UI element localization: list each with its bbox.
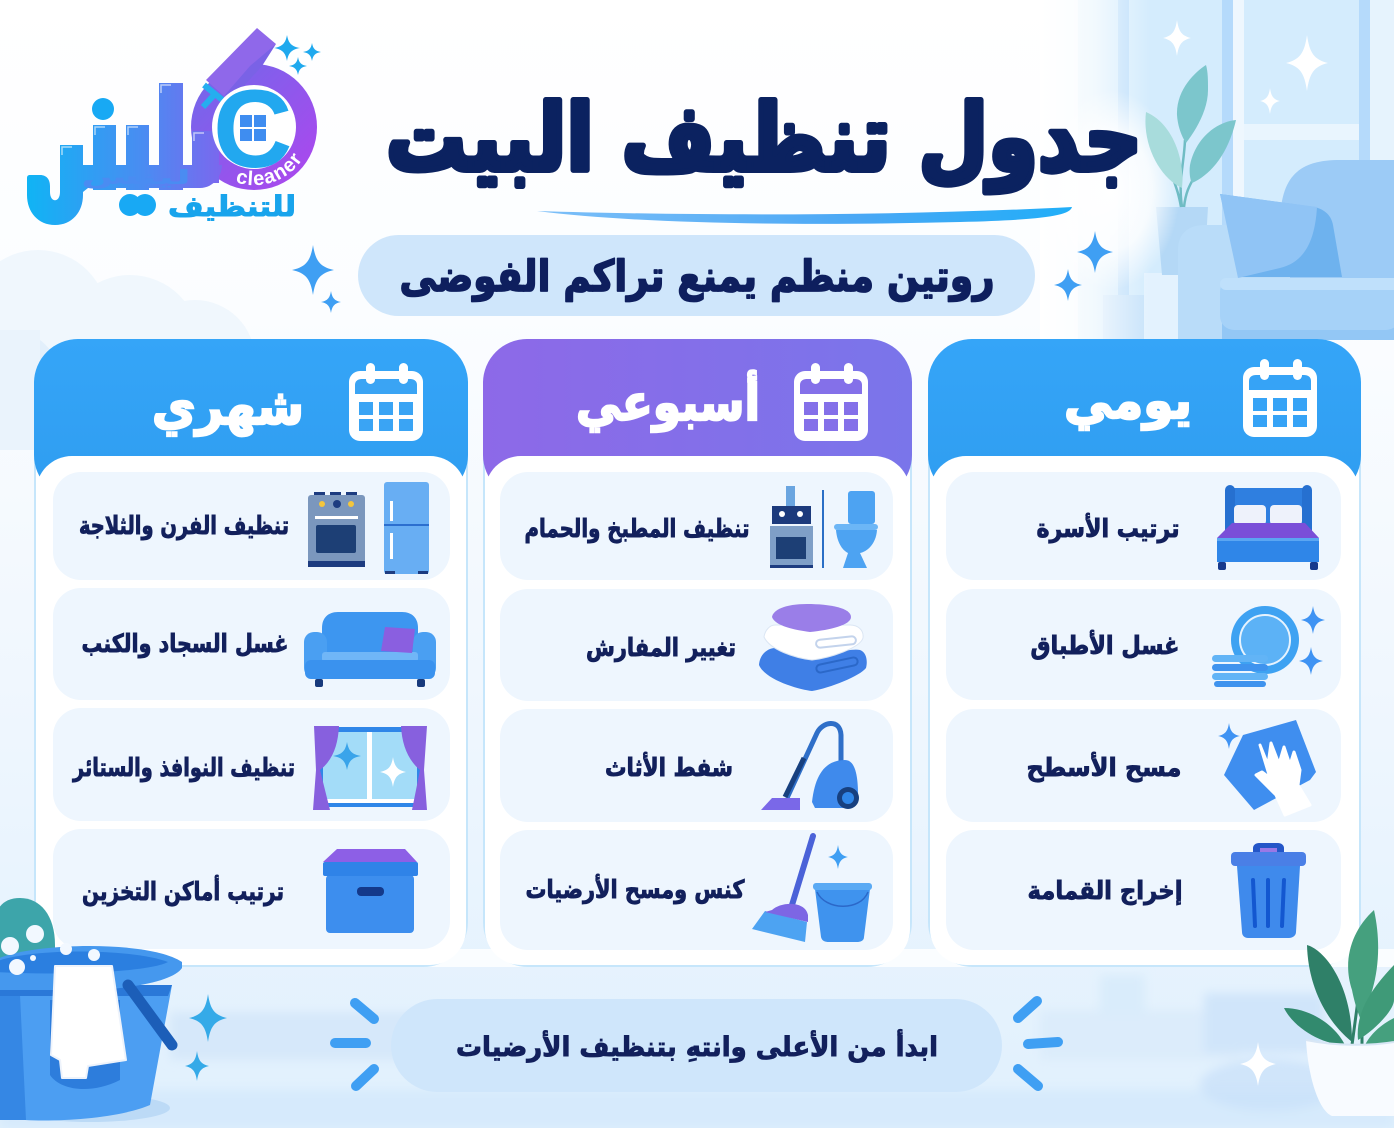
logo: sparkles [274,35,321,75]
logo: cleaner: cleaner [236,153,300,186]
subtitle text: روتين منظم يمنع تراكم الفوضى [400,252,994,302]
title: جدول تنظيف البيت [386,85,1142,193]
row: carpets and sofa [53,588,450,700]
row: take out trash: إخراج القمامة [1028,876,1182,906]
panel: daily [928,339,1361,966]
logo: purple disc [191,64,317,190]
rays left [335,1003,374,1086]
row: wipe surfaces: مسح الأسطح [1026,752,1182,783]
rays right [1018,1001,1058,1086]
row: storage [53,829,450,949]
daily heading: يومي [1064,372,1192,431]
logo: wordmark: لينس [81,165,191,189]
row: make beds: ترتيب الأسرة [1036,513,1180,544]
logo: letter C: C [213,68,292,191]
background scene: window and sofa [1040,0,1394,340]
row: vacuuming [500,709,893,822]
logo: wordmark stems [27,83,222,225]
row: oven and fridge: تنظيف الفرن والثلاجة [79,511,289,541]
panel: weekly [483,339,912,966]
row: wash dishes: غسل الأطباق [1030,630,1180,660]
logo: window [240,115,266,141]
row: sweeping and mopping: كنس ومسح الأرضيات [526,874,745,905]
row: take out trash [946,830,1341,950]
row: sweeping and mopping [500,830,893,950]
bottom left sparkles [185,994,227,1081]
row: windows and curtains: تنظيف النوافذ والستائر [71,753,295,783]
header sparkles [292,231,1113,313]
daily calendar icon [1243,359,1317,437]
plant bottom right [1284,910,1394,1116]
logo: squeegee [203,28,276,107]
logo: C ring [212,85,296,169]
logo: subtitle: للتنظيف [168,190,296,223]
row: wipe surfaces [946,709,1341,822]
subtitle pill [358,235,1035,316]
weekly heading: أسبوعي [576,370,760,433]
logo [27,28,321,225]
row: wash dishes [946,589,1341,700]
teal plant behind title [1145,65,1236,207]
row: bedding [500,589,893,701]
weekly calendar icon [794,363,868,441]
bucket illustration [0,898,182,1122]
row: kitchen and bathroom [500,472,893,580]
bottom pill text: ابدأ من الأعلى وانتهِ بتنظيف الأرضيات [456,1029,938,1063]
floor background [0,949,1394,1128]
row: storage: ترتيب أماكن التخزين [82,875,284,907]
row: oven and fridge [53,472,450,580]
row: windows and curtains [53,708,450,821]
row: bedding: تغيير المفارش [586,633,736,663]
row: kitchen and bathroom: تنظيف المطبخ والحمام [524,514,750,544]
bottom pill [391,999,1002,1092]
bottom right white sparkle [1240,1042,1276,1086]
title underline swoosh [537,207,1072,224]
row: vacuuming: شفط الأثاث [605,752,733,782]
monthly calendar icon [349,363,423,441]
row: make beds [946,472,1341,580]
row: carpets and sofa: غسل السجاد والكنب [82,629,288,659]
monthly heading: شهري [152,378,304,437]
background sparkles top right [1163,20,1328,114]
panel: monthly [34,339,468,966]
background clouds left [0,250,255,450]
logo: dots [92,98,156,216]
